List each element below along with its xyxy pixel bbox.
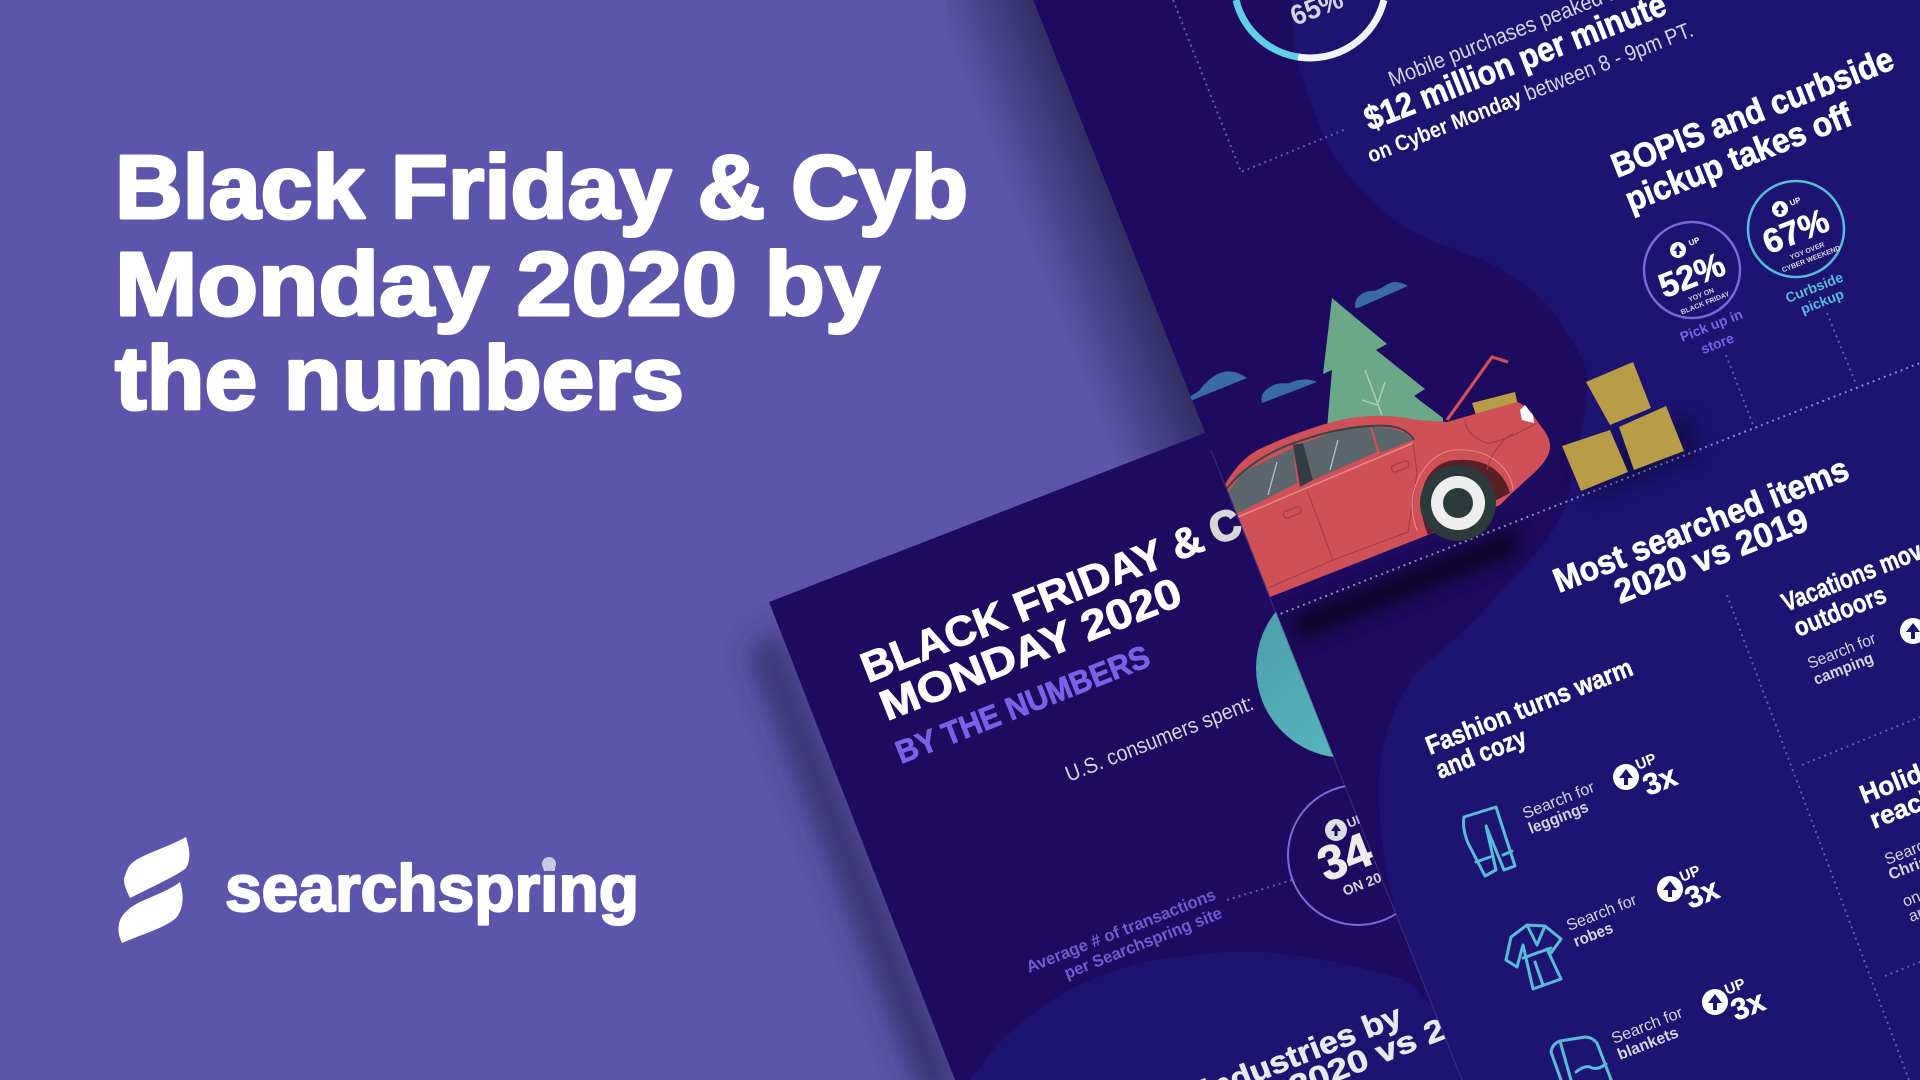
text: mobile purchases: on Cyber Monday between 8 - 9pm PT. <box>1364 17 1697 168</box>
label: average transactions: per Searchspring site <box>1062 903 1225 983</box>
icon: tree <box>1323 298 1443 424</box>
heading: fashion turns warm <box>1424 662 1634 778</box>
item: blankets: blankets <box>1615 1024 1681 1064</box>
item: blankets <box>1551 975 1770 1080</box>
upper document edge <box>1211 450 1462 1080</box>
item: leggings: UP <box>1633 750 1659 774</box>
section: holiday <box>1858 763 1920 922</box>
shadow under car <box>1290 528 1520 640</box>
title: the numbers <box>115 329 684 429</box>
heading: Black Friday & Cyber Monday 2020: BLACK FRIDAY & <box>854 514 1210 691</box>
section: vacations <box>1779 544 1920 684</box>
title: Black Friday & Cyb <box>115 138 968 238</box>
heading: fashion turns warm: and cozy <box>1431 722 1531 785</box>
stat: pick up in store: BLACK FRIDAY <box>1680 291 1731 316</box>
teal circle <box>1256 612 1334 757</box>
title <box>115 138 968 429</box>
item: robes: 3x <box>1680 872 1724 916</box>
item: blankets: UP <box>1722 975 1748 999</box>
stat: pick up in store: 52% <box>1653 246 1731 306</box>
stat: pick up in store: Pick up in <box>1677 306 1745 345</box>
section: vacations: outdoors <box>1789 579 1890 643</box>
item: leggings: 3x <box>1638 759 1682 803</box>
stat: pick up in store: YOY ON <box>1688 287 1715 304</box>
stat: pick up in store: store <box>1698 330 1736 357</box>
icon: leggings <box>1464 807 1515 876</box>
icon: logo mark <box>118 837 189 943</box>
icon: stacked boxes <box>1562 362 1700 500</box>
icon: blanket <box>1551 1037 1615 1080</box>
stat circle: up 34%: UP <box>1345 810 1367 831</box>
item: robes: UP <box>1677 862 1703 886</box>
section: vacations: Search for <box>1805 630 1879 673</box>
lighter blob <box>970 952 1500 1080</box>
stat: curbside pickup: Curbside <box>1783 269 1846 306</box>
panel: lower document <box>769 433 1462 1080</box>
icon: box in trunk <box>1472 392 1518 414</box>
icon: clouds <box>1190 282 1408 403</box>
stat circle: up 34%: ON 2020 <box>1340 863 1398 899</box>
item: blankets: Search for <box>1609 1004 1686 1048</box>
item: blankets: 3x <box>1726 984 1770 1028</box>
item: robes: Search for <box>1564 892 1640 935</box>
icon: car <box>1222 402 1550 610</box>
item: leggings: Search for <box>1520 779 1598 823</box>
item: robes <box>1506 862 1724 989</box>
section: fashion <box>1421 652 1770 1080</box>
item: robes: robes <box>1571 920 1616 951</box>
stat circle: up 34%: 34% <box>1311 808 1419 892</box>
heading: most searched items: Most searched items <box>1548 450 1854 600</box>
heading: most searched items: 2020 vs 2019 <box>1609 501 1814 611</box>
wordmark: searchspring <box>225 851 639 925</box>
donut chart: 65% <box>1236 0 1384 58</box>
icon: robe <box>1506 925 1561 989</box>
heading: Black Friday & Cyber Monday 2020: MONDAY 2020 <box>873 568 1188 729</box>
heading: Black Friday & Cyber Monday 2020: C <box>1202 499 1248 553</box>
stat: curbside pickup: 67% <box>1757 202 1835 262</box>
icon: open trunk lid <box>1447 357 1508 420</box>
label: average transactions: Average # of transactions <box>1024 885 1218 977</box>
heading: fashion turns warm: Fashion turns warm <box>1421 652 1637 761</box>
stat: curbside pickup: CYBER WEEKEND <box>1781 245 1842 274</box>
stat: pick up in store <box>1644 222 1745 357</box>
logo dot accent <box>542 857 556 871</box>
stat: curbside pickup: UP <box>1788 195 1803 208</box>
item: leggings <box>1464 750 1682 876</box>
section: vacations: camping <box>1811 650 1876 689</box>
text: U.S. consumers spent: U.S. consumers spent: <box>1062 690 1257 787</box>
title: Monday 2020 by <box>115 235 880 335</box>
lighter wave background <box>1292 0 1920 1080</box>
panel: upper document <box>1033 0 1920 1080</box>
stat: curbside pickup: YOY OVER <box>1789 242 1826 262</box>
logo: Searchspring <box>118 837 639 943</box>
upper document shadow <box>947 0 1462 1080</box>
stat: curbside pickup <box>1748 181 1846 317</box>
heading: BOPIS and curbside: pickup takes off <box>1620 96 1858 219</box>
item: leggings: leggings <box>1526 799 1591 838</box>
heading: top industries <box>1200 1008 1446 1080</box>
heading: BOPIS and curbside: BOPIS and curbside <box>1606 40 1899 185</box>
stat: curbside pickup: pickup <box>1798 286 1846 317</box>
lower document shadow <box>750 625 960 1080</box>
stat: pick up in store: UP <box>1687 235 1702 248</box>
stat circle: up 34% <box>1287 785 1396 926</box>
subheading: by the numbers: BY THE NUMBERS <box>890 638 1155 771</box>
